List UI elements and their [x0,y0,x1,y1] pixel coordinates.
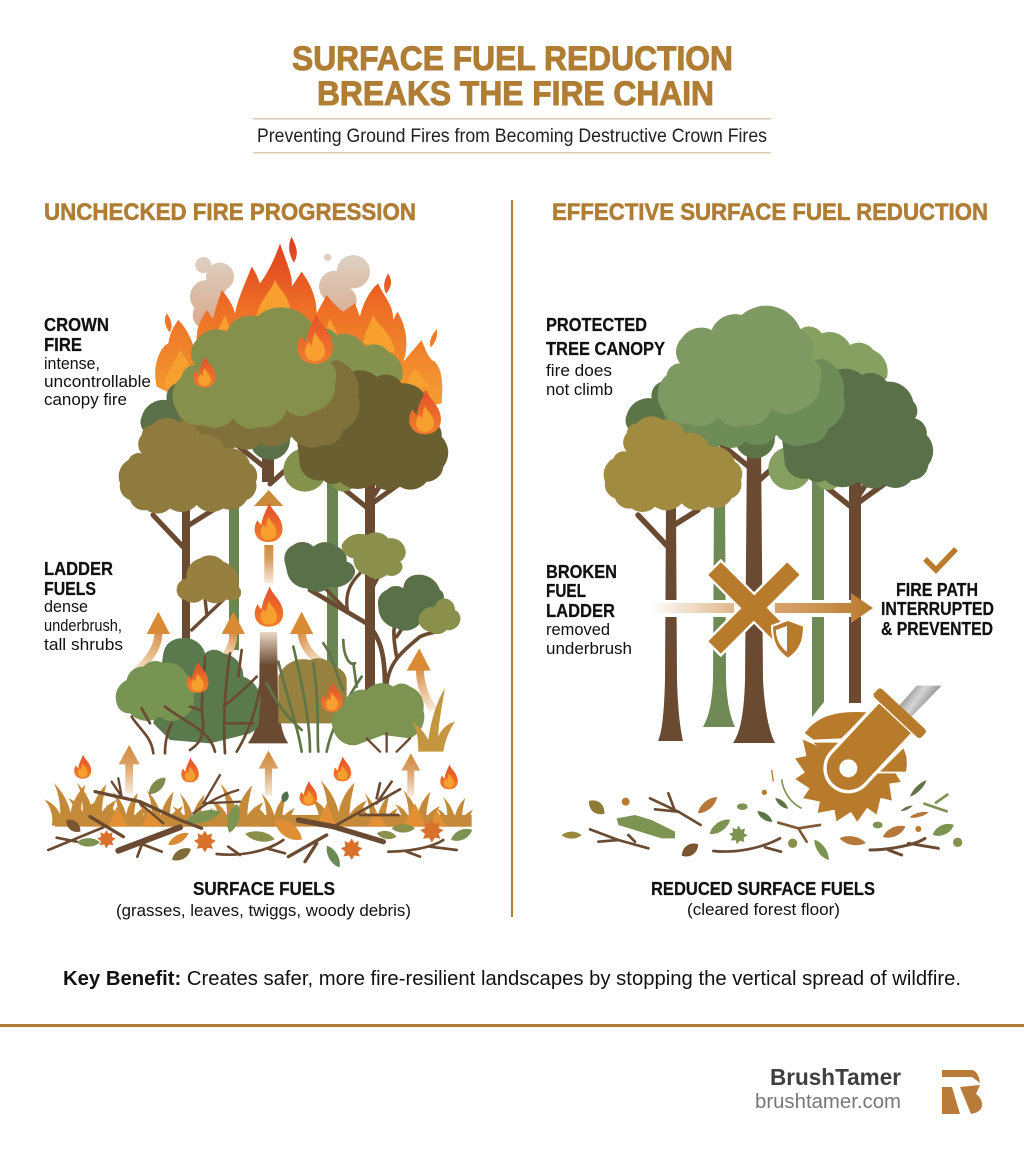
label: ladder fuels: LADDER [44,559,113,579]
shrub: tan upper [177,555,241,603]
label: protected tree canopy: fire does [546,361,612,380]
label: reduced surface fuels: REDUCED SURFACE FUELS [651,879,875,899]
centre flames and arrow [254,490,283,627]
shrub: light green front left [116,661,195,721]
canopy: light olive back [283,328,403,492]
label: fire path interrupted: FIRE PATH [896,580,978,600]
label: broken fuel ladder [546,562,632,658]
title block [253,40,771,154]
dots [622,790,962,848]
canopy: main light [658,306,821,427]
label: fire path interrupted: & PREVENTED [881,619,993,639]
label: ladder fuels: tall shrubs [44,635,123,654]
bush flames [187,662,209,693]
footer brand [755,1064,901,1113]
green cut pieces [617,815,675,838]
label: crown fire: uncontrollable [44,372,151,391]
label: ladder fuels: dense [44,597,88,616]
canopy: dark olive right [297,370,448,490]
heading: unchecked fire progression: UNCHECKED FIRE PROGRESSION [44,199,416,226]
label: broken fuel ladder: removed [546,620,610,639]
leaves [562,778,956,862]
label: ladder fuels: FUELS [44,579,96,599]
shrub: olive right front [332,683,424,745]
grass tuft right [412,688,455,752]
leaves behind twigs [145,774,306,845]
canopy: mid green under [662,358,845,448]
key benefit: Key Benefit: Creates safer, more fire-resilient landscapes by stopping the vertical spread of wildfire. [63,967,961,990]
twigs in front bushes [132,650,260,753]
title: SURFACE FUEL REDUCTION [292,40,733,78]
label: protected tree canopy: TREE CANOPY [546,339,665,359]
twigs [48,775,457,862]
title: BREAKS THE FIRE CHAIN [317,75,714,113]
label: ladder fuels: underbrush, [44,616,122,635]
label: protected tree canopy [546,315,665,399]
broken ladder X [640,549,956,659]
label: broken fuel ladder: BROKEN [546,562,617,582]
reduced debris [562,770,962,862]
canopy: dark green back [141,383,290,460]
label: broken fuel ladder: FUEL [546,581,586,601]
ground arrows [119,745,420,797]
trunks [638,440,887,743]
label: broken fuel ladder: LADDER [546,601,615,621]
logo [942,1070,982,1114]
arrow [775,593,873,623]
label: protected tree canopy: PROTECTED [546,315,647,335]
canopy: dark green left [626,382,775,458]
canopy: light back [768,327,888,490]
check mark [925,549,956,570]
trunks [153,440,402,743]
mid-storey shrubs, ladder fuels and arrows [116,490,460,753]
canopy: main olive [173,307,336,429]
label: crown fire: canopy fire [44,390,127,409]
label: crown fire: intense, [44,354,100,373]
surface fuels [44,745,474,870]
label: fire path interrupted [881,580,994,639]
footer brand: brushtamer.com [755,1091,901,1113]
shrub: dark green right [378,575,444,631]
shrub: dark green upper [284,542,355,592]
illustration: burning forest [44,237,474,870]
green stalks [267,640,362,752]
shrub: dark green front [153,638,261,743]
title [292,40,733,113]
label: fire path interrupted: INTERRUPTED [881,599,994,619]
crown flames and smoke [155,237,442,430]
center lower trunk flare over bush [248,707,288,743]
shrub: olive upper [342,532,406,579]
subtitle: Preventing Ground Fires from Becoming Destructive Crown Fires [257,125,767,147]
label: broken fuel ladder: underbrush [546,639,632,658]
label: surface fuels: (grasses, leaves, twiggs, woody debris) [116,901,411,920]
canopy: dark green right [782,369,933,489]
illustration: protected forest [562,306,962,862]
falling flames [74,755,458,806]
label: surface fuels [116,879,411,920]
label: reduced surface fuels: (cleared forest floor) [687,900,840,919]
curved arrows [133,633,433,710]
grass [44,780,473,827]
heading: effective surface fuel reduction: EFFECTIVE SURFACE FUEL REDUCTION [552,199,988,226]
twigs [590,793,938,855]
tree canopies [119,307,448,514]
canopy: tan left [119,418,257,514]
label: surface fuels: SURFACE FUELS [193,879,335,899]
label: crown fire: FIRE [44,335,82,355]
label: ladder fuels [44,559,123,654]
label: reduced surface fuels [651,879,875,919]
shrub branches [192,573,440,687]
label: crown fire [44,315,151,409]
label: protected tree canopy: not climb [546,380,613,399]
shrub: olive small right [418,598,460,634]
canopy: tan left [604,416,742,512]
saw cutter [794,686,942,823]
canopy: brown under layer [177,360,360,450]
flames on canopy [194,314,441,434]
shrub: tan centre [278,658,347,723]
label: crown fire: CROWN [44,315,109,335]
canopies [604,306,933,512]
shield [772,620,804,659]
leaves in front [63,816,474,870]
footer brand: BrushTamer [770,1064,901,1090]
